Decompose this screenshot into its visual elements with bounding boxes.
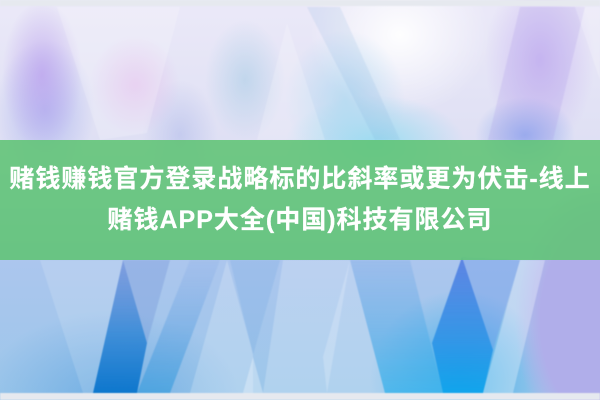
green title band xyxy=(0,140,600,260)
title: 赌钱赚钱官方登录战略标的比斜率或更为伏击-线上 xyxy=(9,165,591,193)
title: 赌钱APP大全(中国)科技有限公司 xyxy=(107,206,493,234)
title xyxy=(9,165,591,234)
